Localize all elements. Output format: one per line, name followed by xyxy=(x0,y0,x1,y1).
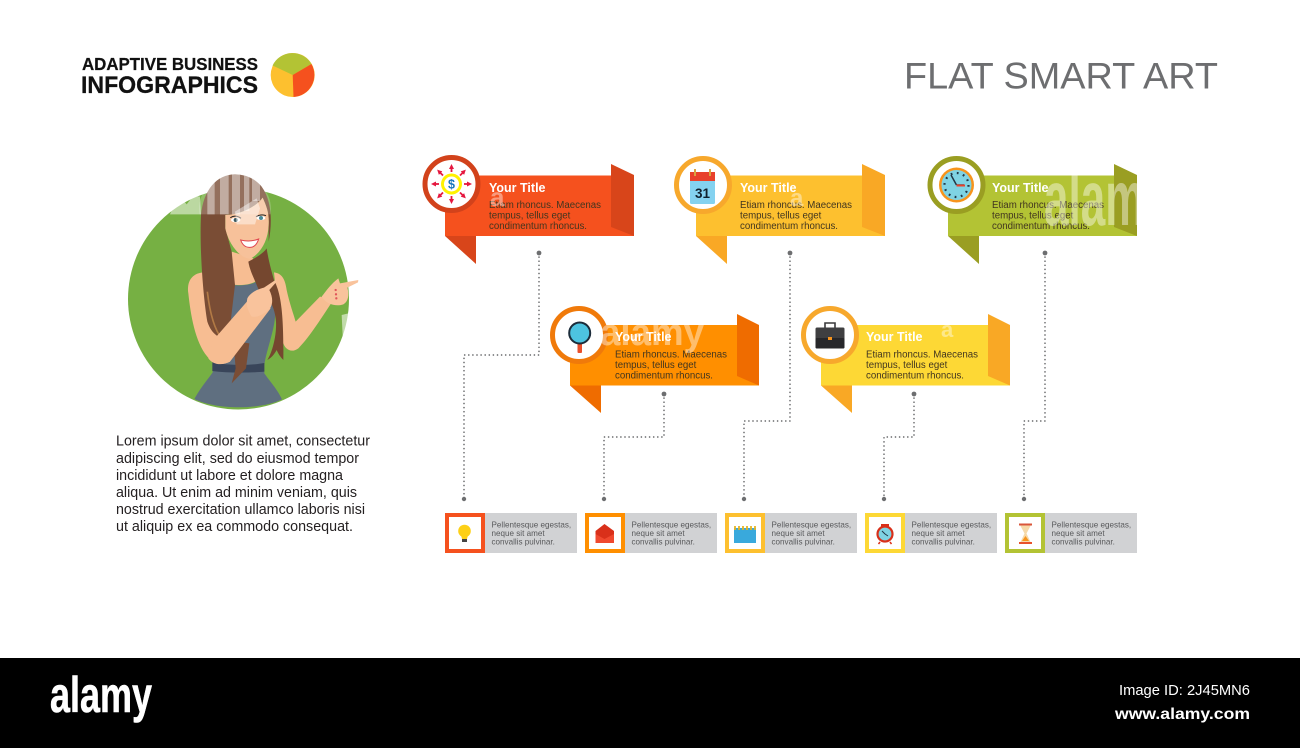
icon: dollar burst xyxy=(425,158,478,210)
panel: banner 2 amber: Etiam rhoncus. Maecenas xyxy=(740,200,852,211)
text block: intro paragraph: aliqua. Ut enim ad minim veniam, quis xyxy=(116,485,357,501)
item row: schedule: Pellentesque egestas, xyxy=(772,520,851,530)
panel: banner 5 yellow: Etiam rhoncus. Maecenas xyxy=(866,350,978,360)
belt xyxy=(212,362,264,373)
icon: alarm clock xyxy=(878,524,892,544)
icon: light bulb xyxy=(458,525,471,542)
panel: banner 3 olive: tempus, tellus eget xyxy=(992,210,1074,222)
icon: magnifier xyxy=(552,308,606,362)
item row: mail: neque sit amet xyxy=(632,529,685,538)
pointing hand xyxy=(247,280,277,317)
item row: time: convallis pulvinar. xyxy=(1052,538,1115,546)
icon: briefcase xyxy=(804,308,856,362)
panel: banner 2 amber: condimentum rhoncus. xyxy=(740,221,838,232)
item row: alarm: neque sit amet xyxy=(912,529,965,538)
panel: banner 4 orange: condimentum rhoncus. xyxy=(615,370,713,382)
item row: alarm: Pellentesque egestas, xyxy=(912,520,991,530)
logo heading xyxy=(81,54,258,99)
right hand xyxy=(322,278,358,305)
connector lines xyxy=(462,251,1047,501)
item row: schedule xyxy=(725,513,857,553)
lower hair strand xyxy=(232,341,249,383)
icon: hourglass xyxy=(1019,524,1032,544)
dress xyxy=(194,280,282,407)
text block: intro paragraph: incididunt ut labore et dolore magna xyxy=(116,468,343,484)
watermark on head xyxy=(198,174,272,214)
item row: schedule: neque sit amet xyxy=(772,529,825,538)
text block: intro paragraph: adipiscing elit, sed do eiusmod tempor xyxy=(116,451,359,467)
panel: banner 1 red: Your Title xyxy=(489,181,546,195)
watermark fragments xyxy=(490,176,1137,353)
panel: banner 5 yellow: condimentum rhoncus. xyxy=(866,370,964,382)
left hair and head xyxy=(201,174,271,341)
panel: banner 1 red xyxy=(425,158,634,264)
item row: idea: neque sit amet xyxy=(492,529,545,538)
item row: mail xyxy=(585,513,717,553)
alamy logo: alamy xyxy=(50,667,152,723)
neck xyxy=(232,252,257,285)
image id: Image ID: 2J45MN6 xyxy=(1119,682,1250,699)
panel: banner 2 amber: Your Title xyxy=(740,181,797,195)
panel: banner 1 red: Etiam rhoncus. Maecenas xyxy=(489,200,601,211)
right hair xyxy=(248,248,283,360)
watermark fragments: alamy xyxy=(600,312,704,354)
text block: intro paragraph: nostrud exercitation ullamco laboris nisi xyxy=(116,502,365,518)
item row: alarm xyxy=(865,513,997,553)
icon: logo pie xyxy=(271,53,315,97)
panel: banner 4 orange: tempus, tellus eget xyxy=(615,360,697,371)
item row: idea: Pellentesque egestas, xyxy=(492,520,571,530)
item row: idea xyxy=(445,513,577,553)
text block: intro paragraph xyxy=(116,434,370,535)
eyes and mouth xyxy=(231,218,240,222)
panel: banner 3 olive: Etiam rhoncus. Maecenas xyxy=(992,200,1104,211)
item row: mail: convallis pulvinar. xyxy=(632,538,695,546)
illustration: woman in green circle xyxy=(128,174,358,410)
icon: envelope xyxy=(596,524,614,543)
right arm xyxy=(274,272,333,351)
text block: intro paragraph: ut aliquip ex ea commodo consequat. xyxy=(116,519,353,535)
watermark fragments: a xyxy=(490,182,505,212)
forearm xyxy=(208,300,271,364)
item row: idea: convallis pulvinar. xyxy=(492,538,555,546)
logo heading: ADAPTIVE BUSINESS xyxy=(82,54,258,74)
face xyxy=(225,198,269,259)
item row: mail: Pellentesque egestas, xyxy=(632,520,711,530)
item row: schedule: convallis pulvinar. xyxy=(772,538,835,546)
panel: banner 3 olive: Your Title xyxy=(992,181,1049,195)
panel: banner 5 yellow xyxy=(804,308,1010,413)
title: FLAT SMART ART xyxy=(904,56,1218,96)
item row: time: Pellentesque egestas, xyxy=(1052,520,1131,530)
website: www.alamy.com xyxy=(1114,706,1250,723)
panel: banner 5 yellow: tempus, tellus eget xyxy=(866,360,948,371)
item row: alarm: convallis pulvinar. xyxy=(912,538,975,546)
panel: banner 4 orange xyxy=(552,308,759,413)
panel: banner 3 olive: condimentum rhoncus. xyxy=(992,221,1090,232)
icon: calendar xyxy=(676,158,730,212)
panel: banner 2 amber xyxy=(676,158,885,264)
icon: calendar strip xyxy=(734,526,756,543)
logo heading: INFOGRAPHICS xyxy=(81,72,258,99)
panel: banner 1 red: condimentum rhoncus. xyxy=(489,221,587,232)
text block: intro paragraph: Lorem ipsum dolor sit amet, consectetur xyxy=(116,434,370,450)
upper arm xyxy=(188,272,230,364)
panel: banner 1 red: tempus, tellus eget xyxy=(489,210,571,222)
item row: time xyxy=(1005,513,1137,553)
panel: banner 3 olive xyxy=(930,158,1137,264)
panel: banner 2 amber: tempus, tellus eget xyxy=(740,210,822,222)
watermark fragments: alamy xyxy=(1044,154,1169,242)
icon: wall clock xyxy=(930,158,983,212)
watermark fragments: a xyxy=(790,185,804,212)
icon: calendar: 31 xyxy=(695,186,710,201)
watermark fragments: a xyxy=(941,317,954,342)
panel: banner 4 orange: Your Title xyxy=(615,330,672,344)
panel: banner 5 yellow: Your Title xyxy=(866,330,923,344)
item row: time: neque sit amet xyxy=(1052,529,1105,538)
icon: dollar burst: $ xyxy=(448,178,455,192)
footer bar xyxy=(0,658,1300,748)
panel: banner 4 orange: Etiam rhoncus. Maecenas xyxy=(615,350,727,360)
